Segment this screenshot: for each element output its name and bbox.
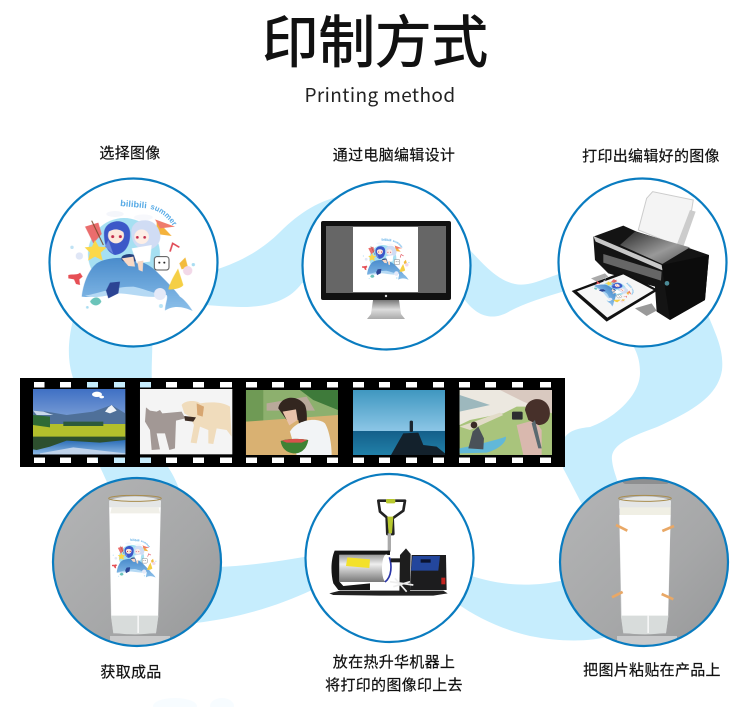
step 5 label: 放在热升华机器上: [333, 654, 455, 671]
photo: cat and dog: [140, 389, 232, 454]
step 1 circle: artwork: [50, 178, 218, 346]
step 1 label: 选择图像: [99, 145, 161, 162]
step 6 circle: finished glass: [53, 478, 221, 650]
step 6 label: 获取成品: [100, 664, 162, 681]
photo: girl with watermelon: [246, 390, 338, 455]
step 2 circle: monitor: [302, 182, 470, 350]
step 5 circle: heat press machine: [306, 474, 474, 642]
photo: figure on seaside rock: [353, 390, 445, 455]
step 3 label: 打印出编辑好的图像: [582, 148, 720, 165]
step 2 label: 通过电脑编辑设计: [333, 147, 455, 164]
step 4 label: 把图片粘贴在产品上: [583, 662, 721, 679]
film strip: [20, 378, 565, 467]
step 4 circle: glass with taped blank: [560, 470, 728, 650]
photo: mountain lake: [33, 389, 125, 454]
background ribbons: [69, 195, 722, 707]
step 5 label: 将打印的图像印上去: [325, 677, 463, 694]
subtitle: Printing method: [304, 81, 456, 108]
photo: woman with camera in meadow: [460, 390, 552, 455]
step 3 circle: printer: [558, 178, 726, 346]
title: 印制方式: [262, 11, 488, 74]
step 5 label: [325, 654, 463, 694]
